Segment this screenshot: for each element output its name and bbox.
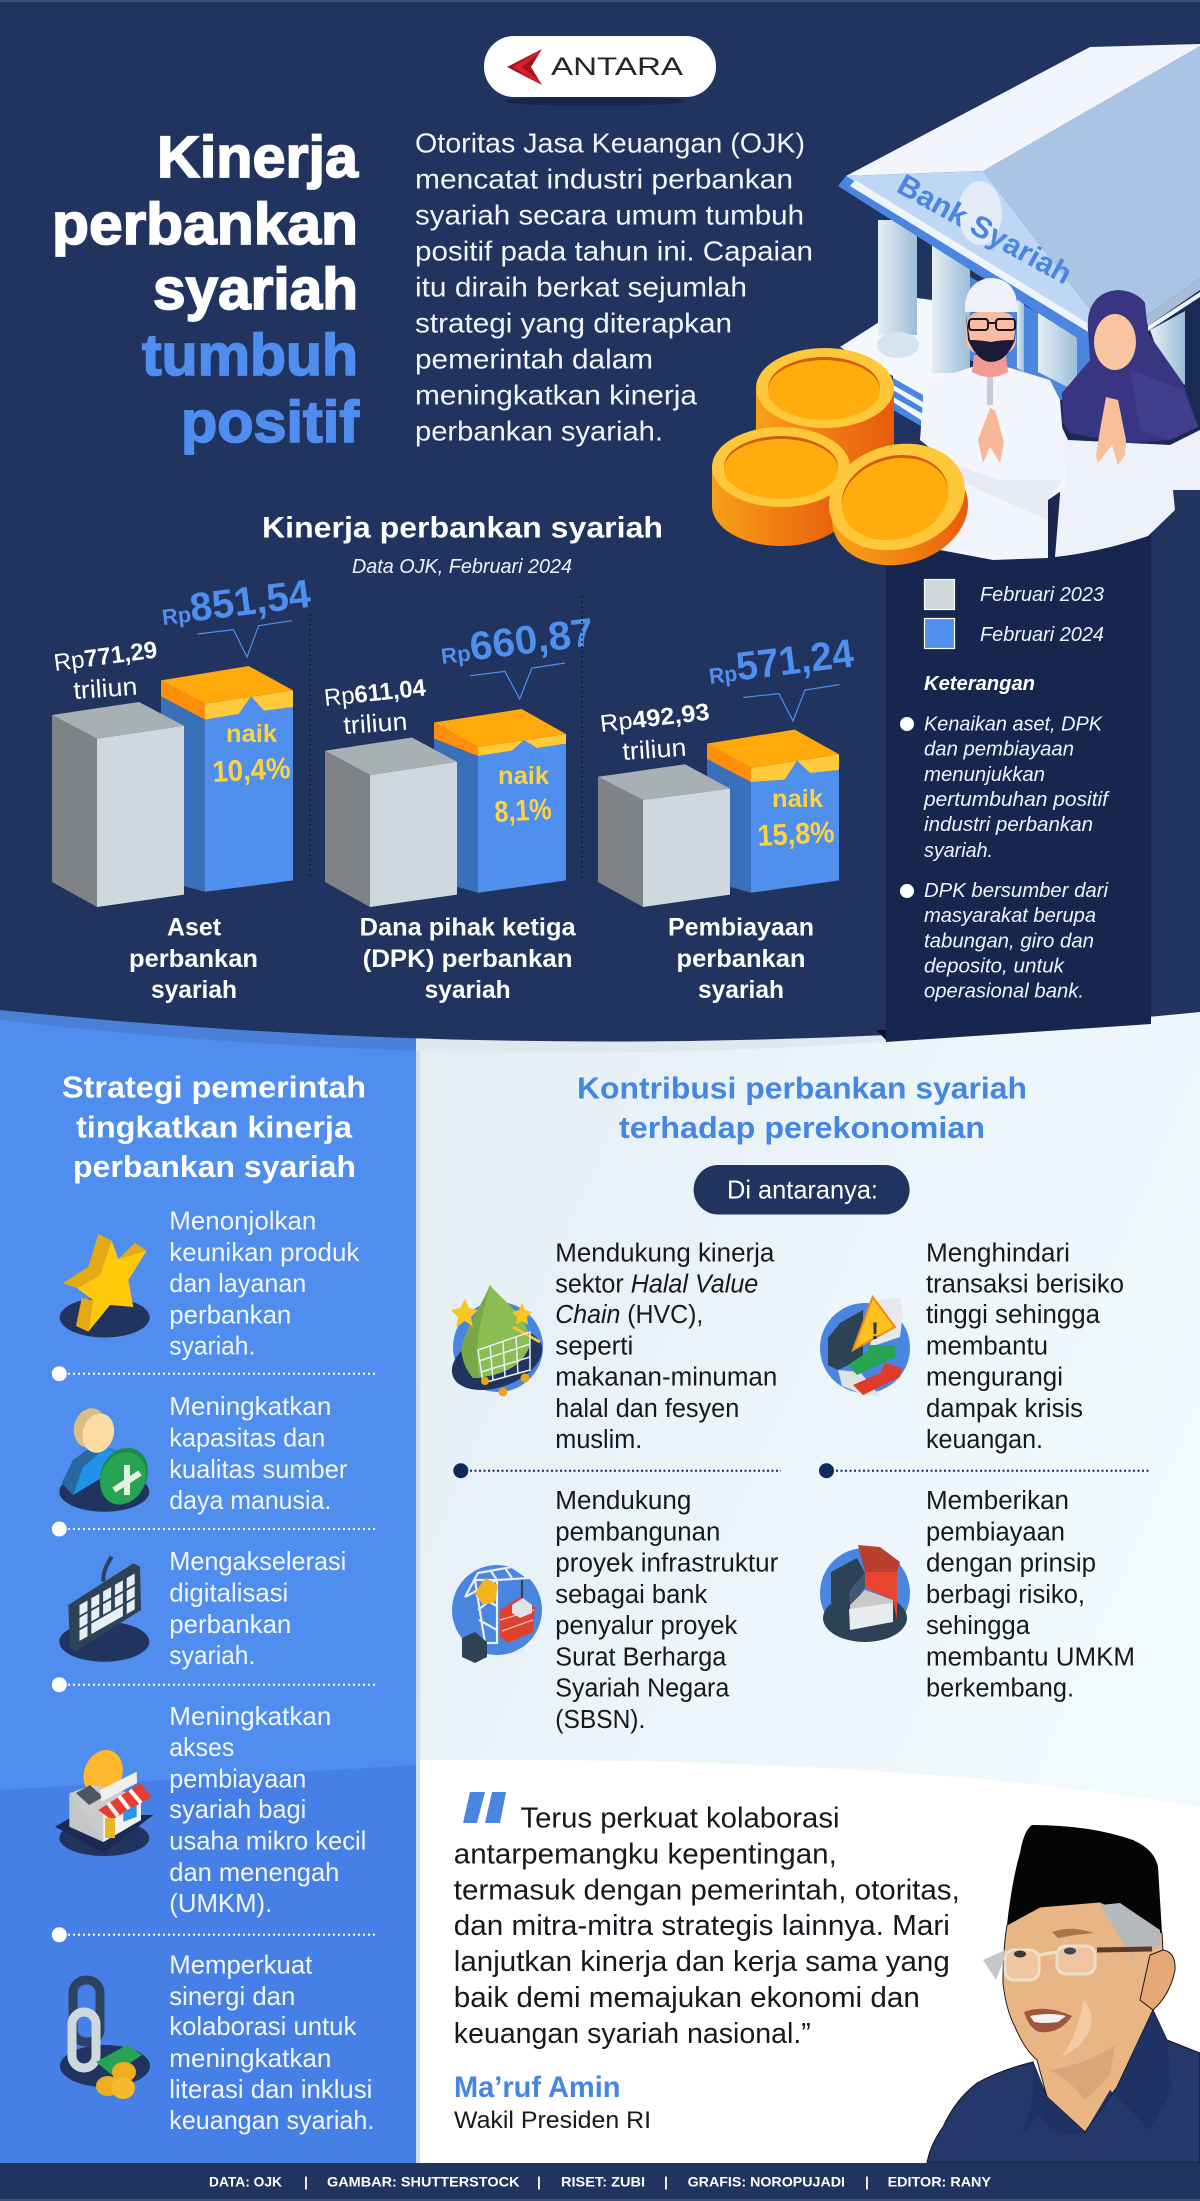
speaker role: Wakil Presiden RI <box>454 2107 651 2134</box>
footer bar: | <box>664 2174 668 2190</box>
value 2023: Rp492,93 <box>599 699 711 738</box>
contribution 3 <box>452 1487 779 1734</box>
logo pill <box>484 36 716 106</box>
text: Chain (HVC), <box>555 1301 703 1329</box>
contribution heading: terhadap perekonomian <box>619 1110 985 1145</box>
quote text: antarpemangku kepentingan, <box>454 1838 837 1870</box>
intro paragraph: syariah secara umum tumbuh <box>415 200 804 230</box>
text: proyek infrastruktur <box>555 1550 779 1578</box>
text: Menonjolkan <box>169 1205 316 1235</box>
quote text <box>454 1803 960 2050</box>
text: akses <box>169 1732 234 1762</box>
text: pembangunan <box>555 1518 720 1546</box>
text: (UMKM). <box>169 1888 272 1918</box>
strategy item 3 <box>59 1546 346 1670</box>
illustration: bank building <box>838 44 1200 520</box>
strategy item 2 <box>59 1391 348 1515</box>
category label: perbankan <box>129 945 258 973</box>
intro paragraph: perbankan syariah. <box>415 416 663 446</box>
text: literasi dan inklusi <box>169 2074 372 2104</box>
contribution heading <box>577 1070 1027 1145</box>
increase value: 15,8% <box>757 816 835 853</box>
text: Meningkatkan <box>169 1391 331 1421</box>
strategy heading <box>62 1069 366 1184</box>
category label <box>360 914 577 1004</box>
text: Menghindari <box>926 1239 1070 1267</box>
quote text: lanjutkan kinerja dan kerja sama yang <box>454 1946 950 1978</box>
callout <box>470 663 565 699</box>
text: pembiayaan <box>926 1518 1065 1546</box>
text: sinergi dan <box>169 1981 295 2011</box>
increase label: naik <box>226 720 277 748</box>
contribution 1 <box>444 1239 777 1454</box>
legend: Februari 2023 <box>924 580 1104 610</box>
bar group: aset <box>52 572 314 1004</box>
legend: Februari 2024: Februari 2024 <box>980 624 1104 646</box>
intro paragraph: itu diraih berkat sejumlah <box>415 272 747 302</box>
footer bar: GAMBAR: SHUTTERSTOCK <box>327 2174 520 2190</box>
note 2: deposito, untuk <box>924 956 1065 978</box>
value 2023: Rp771,29 <box>52 637 159 677</box>
icon: halal value chain <box>444 1285 550 1401</box>
footer bar: DATA: OJK <box>209 2174 282 2190</box>
note 1 <box>900 713 1111 862</box>
right contribution panel background <box>420 1000 1200 1900</box>
note 1: dan pembiayaan <box>924 739 1074 761</box>
unit: triliun <box>342 708 408 740</box>
value 2023: Rp611,04 <box>323 674 428 712</box>
text: seperti <box>555 1332 633 1360</box>
title: positif <box>181 390 360 455</box>
footer bar: | <box>865 2174 869 2190</box>
bar group: pembiayaan <box>598 631 857 1004</box>
category label: perbankan <box>676 945 806 973</box>
icon: store with coin <box>55 1744 153 1856</box>
pill: Di antaranya <box>694 1165 910 1214</box>
category label <box>129 914 258 1004</box>
strategy item 4 <box>55 1701 366 1918</box>
illustration: gold coins <box>712 348 980 580</box>
text <box>169 1546 346 1670</box>
text: keuangan. <box>926 1426 1043 1454</box>
left strategy panel background <box>0 1000 420 2170</box>
footer bar: RISET: ZUBI <box>561 2174 645 2190</box>
footer bar: | <box>304 2174 308 2190</box>
text: sektor Halal Value <box>555 1270 758 1298</box>
title: syariah <box>153 257 358 322</box>
text: syariah bagi <box>169 1794 306 1824</box>
category label: syariah <box>425 976 511 1004</box>
text: halal dan fesyen <box>555 1395 739 1423</box>
value 2024: Rp571,24 <box>706 631 857 693</box>
callout <box>197 621 292 657</box>
footer bar: EDITOR: RANY <box>888 2174 992 2190</box>
text <box>555 1487 779 1734</box>
curved shadow band <box>0 1010 886 1052</box>
strategy heading: tingkatkan kinerja <box>76 1110 353 1145</box>
text <box>169 1205 360 1361</box>
notes heading: Keterangan <box>924 673 1035 695</box>
increase value: 8,1% <box>494 793 552 829</box>
title: tumbuh <box>142 323 358 388</box>
text: keuangan syariah. <box>169 2105 374 2135</box>
note 1: menunjukkan <box>924 764 1045 786</box>
illustration: man <box>920 278 1067 560</box>
icon: risk sharing chart <box>820 1545 910 1642</box>
logo pill: ANTARA <box>551 53 683 81</box>
note 1: industri perbankan <box>924 814 1093 836</box>
increase label: naik <box>772 785 823 813</box>
intro paragraph: positif pada tahun ini. Capaian <box>415 236 813 266</box>
text <box>169 1391 348 1515</box>
text: Mendukung kinerja <box>555 1239 775 1267</box>
text: dan layanan <box>169 1268 306 1298</box>
note 2: DPK bersumber dari <box>924 880 1109 902</box>
title: perbankan <box>52 192 358 257</box>
text: dan menengah <box>169 1857 339 1887</box>
text: daya manusia. <box>169 1485 331 1515</box>
icon: chain and money <box>60 1980 150 2099</box>
text: Meningkatkan <box>169 1701 331 1731</box>
category label: Pembiayaan <box>668 914 814 942</box>
text: berkembang. <box>926 1675 1074 1703</box>
bar group: DPK <box>323 610 596 1004</box>
text: kolaborasi untuk <box>169 2011 357 2041</box>
text: perbankan <box>169 1300 291 1330</box>
text: transaksi berisiko <box>926 1270 1124 1298</box>
intro paragraph: pemerintah dalam <box>415 344 653 374</box>
icon: infrastructure <box>452 1565 542 1663</box>
quote text: dan mitra-mitra strategis lainnya. Mari <box>454 1910 950 1942</box>
note 1: syariah. <box>924 840 993 862</box>
footer bar: GRAFIS: NOROPUJADI <box>688 2174 845 2190</box>
text: Mendukung <box>555 1487 691 1515</box>
callout <box>743 685 840 721</box>
title: Kinerja <box>157 125 359 190</box>
note 2: masyarakat berupa <box>924 905 1096 927</box>
text: Mengakselerasi <box>169 1546 346 1576</box>
note 1: Kenaikan aset, DPK <box>924 713 1104 735</box>
category label: syariah <box>698 976 784 1004</box>
strategy item 1 <box>60 1205 360 1361</box>
text: Surat Berharga <box>555 1643 727 1671</box>
text: dengan prinsip <box>926 1550 1096 1578</box>
text <box>926 1487 1135 1703</box>
icon: star <box>60 1234 150 1338</box>
text: Memberikan <box>926 1487 1069 1515</box>
legend: Februari 2024 <box>924 618 1104 648</box>
text: sebagai bank <box>555 1581 708 1609</box>
value 2024: Rp660,87 <box>438 610 596 673</box>
icon: risk warning <box>820 1297 910 1396</box>
pill: Di antaranya: Di antaranya: <box>727 1174 878 1204</box>
dark header background <box>0 0 1200 1100</box>
icon: person plus <box>59 1405 157 1512</box>
category label: Aset <box>167 914 222 942</box>
category label: (DPK) perbankan <box>363 945 573 973</box>
dark curved edge <box>0 900 1200 1042</box>
contribution heading: Kontribusi perbankan syariah <box>577 1070 1027 1105</box>
speaker name: Ma’ruf Amin <box>454 2071 620 2104</box>
text <box>169 1950 374 2135</box>
text: usaha mikro kecil <box>169 1825 366 1855</box>
unit: triliun <box>621 734 687 766</box>
note 2: operasional bank. <box>924 980 1084 1002</box>
note 1: pertumbuhan positif <box>923 789 1111 811</box>
icon: risk warning: ! <box>871 1318 879 1345</box>
footer bar: | <box>537 2174 541 2190</box>
strategy heading: Strategi pemerintah <box>62 1069 366 1104</box>
chart title: Kinerja perbankan syariah <box>262 512 663 544</box>
text: mengurangi <box>926 1364 1063 1392</box>
text: kualitas sumber <box>169 1454 348 1484</box>
text: syariah. <box>169 1331 255 1361</box>
portrait: Ma'ruf Amin <box>927 1825 1200 2163</box>
text: perbankan <box>169 1609 291 1639</box>
unit: triliun <box>72 673 138 705</box>
bank sign: Bank Syariah <box>892 168 1077 291</box>
title <box>52 125 360 455</box>
text <box>926 1239 1124 1454</box>
text: Syariah Negara <box>555 1675 730 1703</box>
strategy item 5 <box>60 1950 374 2135</box>
contribution 4 <box>820 1487 1135 1703</box>
category label: Dana pihak ketiga <box>360 914 577 942</box>
chart subtitle: Data OJK, Februari 2024 <box>352 556 572 578</box>
text: berbagi risiko, <box>926 1581 1085 1609</box>
text <box>555 1239 777 1454</box>
illustration: woman <box>1055 290 1200 557</box>
quote text: baik demi memajukan ekonomi dan <box>454 1982 920 2014</box>
strategy heading: perbankan syariah <box>73 1149 356 1184</box>
text: makanan-minuman <box>555 1364 777 1392</box>
category label: syariah <box>151 976 237 1004</box>
text: keunikan produk <box>169 1237 360 1267</box>
text: muslim. <box>555 1426 642 1454</box>
intro paragraph: Otoritas Jasa Keuangan (OJK) <box>415 128 805 158</box>
note 2: tabungan, giro dan <box>924 930 1094 952</box>
quote panel background <box>420 1760 1200 2170</box>
text: dampak krisis <box>926 1395 1083 1423</box>
intro paragraph: meningkatkan kinerja <box>415 380 697 410</box>
note 2 <box>900 880 1109 1002</box>
text <box>169 1701 366 1918</box>
icon: keyboard <box>59 1557 149 1662</box>
category label <box>668 914 814 1004</box>
quote text: Terus perkuat kolaborasi <box>520 1803 840 1835</box>
text: (SBSN). <box>555 1706 645 1734</box>
text: pembiayaan <box>169 1763 306 1793</box>
text: digitalisasi <box>169 1577 288 1607</box>
text: membantu UMKM <box>926 1643 1135 1671</box>
text: kapasitas dan <box>169 1422 325 1452</box>
increase value: 10,4% <box>212 752 291 789</box>
intro paragraph: mencatat industri perbankan <box>415 164 793 194</box>
intro paragraph <box>415 128 813 446</box>
footer bar <box>0 2163 1200 2201</box>
text: tinggi sehingga <box>926 1301 1101 1329</box>
value 2024: Rp851,54 <box>159 572 314 634</box>
legend: Februari 2023: Februari 2023 <box>980 584 1104 606</box>
text: meningkatkan <box>169 2043 331 2073</box>
contribution 2 <box>820 1239 1124 1454</box>
text: penyalur proyek <box>555 1612 738 1640</box>
text: membantu <box>926 1332 1048 1360</box>
quote mark <box>463 1792 506 1823</box>
quote text: keuangan syariah nasional.” <box>454 2018 811 2050</box>
intro paragraph: strategi yang diterapkan <box>415 308 732 338</box>
text: syariah. <box>169 1640 255 1670</box>
quote text: termasuk dengan pemerintah, otoritas, <box>454 1874 960 1906</box>
text: Memperkuat <box>169 1950 313 1980</box>
increase label: naik <box>498 762 549 790</box>
legend and notes panel <box>876 500 1151 1042</box>
text: sehingga <box>926 1612 1031 1640</box>
